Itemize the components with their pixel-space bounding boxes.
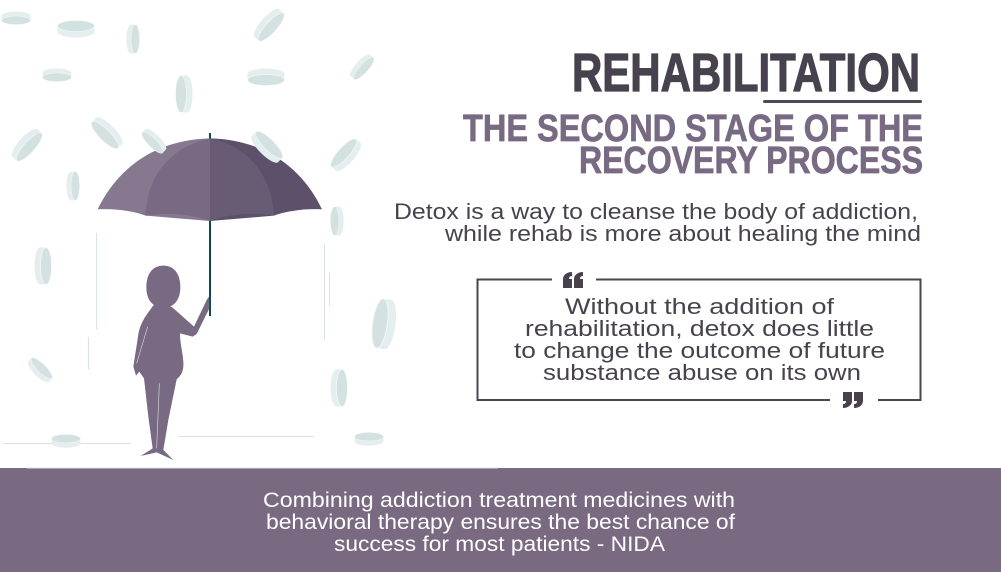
icon: closing quote mark [843,392,863,408]
umbrella canopy [98,138,322,221]
quote text [514,294,885,385]
banner text: success for most patients - NIDA [334,532,666,556]
quote text: Without the addition of [565,294,835,319]
falling pills [2,6,399,448]
intro text [394,199,921,246]
subtitle: RECOVERY PROCESS [579,140,923,182]
intro text: Detox is a way to cleanse the body of addiction, [394,199,918,224]
quote box [478,272,920,408]
subtitle [463,108,923,182]
banner text [263,488,735,556]
title underline [763,100,922,103]
intro text: while rehab is more about healing the mind [444,221,921,246]
person silhouette [133,266,209,460]
bottom banner [0,468,1001,572]
umbrella [98,133,322,316]
quote text: to change the outcome of future [514,338,885,363]
icon: opening quote mark [563,272,583,288]
quote text: rehabilitation, detox does little [525,316,874,341]
quote text: substance abuse on its own [543,360,861,385]
banner text: Combining addiction treatment medicines with [263,488,735,512]
banner text: behavioral therapy ensures the best chance of [266,510,735,534]
rain lines [3,233,330,444]
umbrella shaft [209,133,211,316]
subtitle: THE SECOND STAGE OF THE [463,108,923,150]
